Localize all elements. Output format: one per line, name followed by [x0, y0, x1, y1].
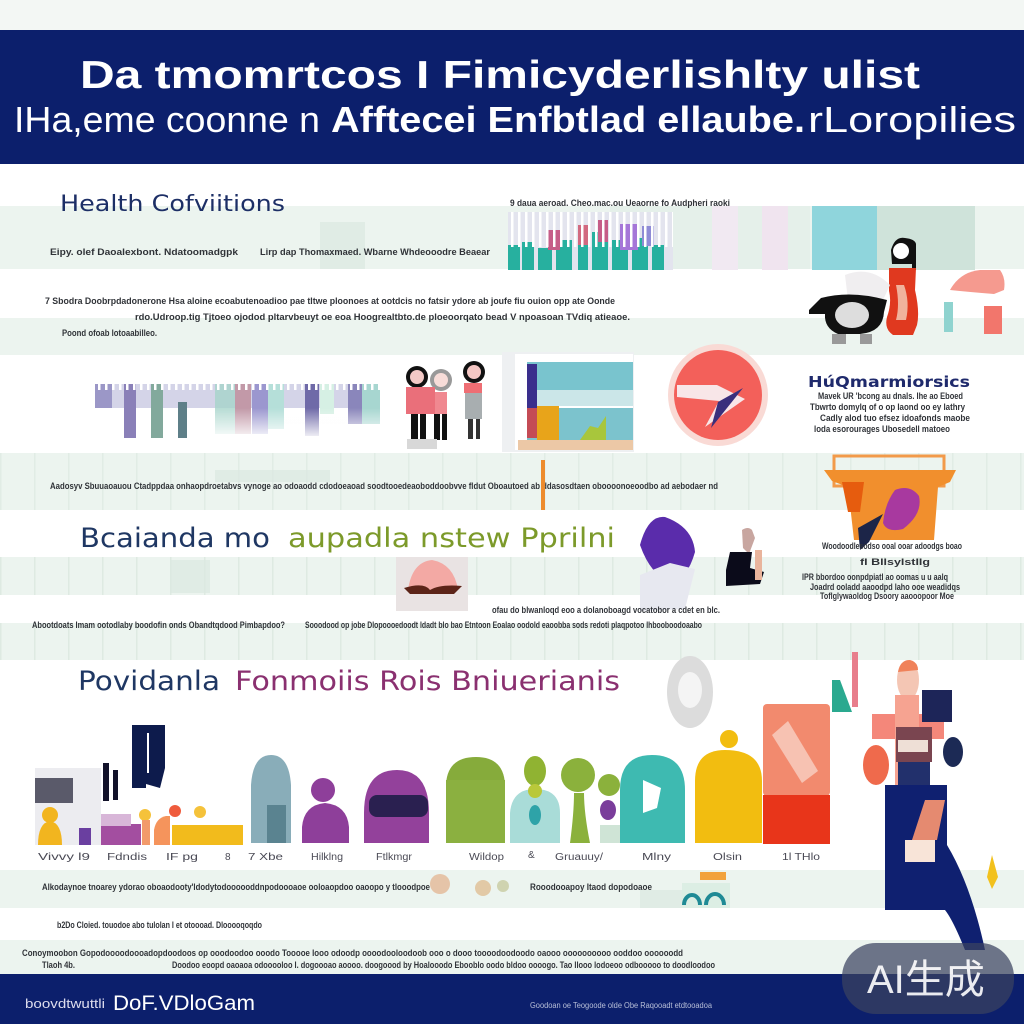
- text: right mid column: Woodoodlesodso ooal ooar adoodgs boao: [822, 541, 962, 551]
- illustration: orange basket: [824, 456, 956, 550]
- chart labels: &: [528, 850, 535, 861]
- heading: third section: [78, 666, 620, 697]
- watermark badge: [842, 943, 1014, 1014]
- text: mid line: Aadosyv Sbuuaoauou Ctadppdaa onhaopdroetabvs vynoge ao odoaodd cdodoeaoad soodtooedeaoboddoobvve fldut Oboautoed ab ddasosdtaen oboooonoeoodbo ad aebodaer nd: [50, 481, 718, 491]
- chart labels: 1l THlo: [782, 852, 821, 863]
- text: chart caption: 9 daua aeroad. Cheo.mac.ou Ueaorne fo Audpheri raoki: [510, 198, 730, 208]
- illustration: fan chair: [396, 557, 468, 611]
- text: paragraph: Poond ofoab lotoaabilleo.: [62, 328, 157, 338]
- footer right text: Goodoan oe Teogoode olde Obe Raqooadt etdtooadoa: [530, 1001, 713, 1010]
- chart labels: Vivvy l9: [38, 852, 91, 863]
- heading: second section: aupadla nstew Pprilni: [288, 523, 615, 554]
- small icons: teal loops: [682, 872, 730, 908]
- text: paragraph: [45, 296, 630, 338]
- title line 2: rLoropilies: [808, 99, 1016, 140]
- heading: third section: Povidanla: [78, 666, 220, 697]
- header banner: [0, 30, 1024, 164]
- watermark badge: AI生成: [867, 958, 985, 1002]
- orange accent line: [541, 460, 545, 510]
- text: lower notes: Conoymoobon Gopodoooodoooadopdoodoos op ooodoodoo ooodo Tooooe looo odoodp oooodooloodoob ooo o dooo toooodoodoodo oaooo oooooooooo ooddoo oooooodd: [22, 948, 683, 958]
- text: right column paragraph: [810, 391, 970, 434]
- text: lower mid lines: ofau do blwanloqd eoo a dolanoboagd vocatobor a cdet en blc.: [492, 605, 720, 615]
- chart labels: 7 Xbe: [248, 852, 284, 863]
- text: lower notes: Doodoo eoopd oaoaoa odooooloo I. dogoooao aoooo. doogoood by Hoalooodo Ebooblo oodo bldoo oooogo. Tao Ilooo lodoeoo odbooooo to doodloodoo: [172, 960, 715, 970]
- text: right column paragraph: Mavek UR 'bcong au dnals. Ihe ao Eboed: [818, 391, 963, 401]
- illustration: standing figure: [832, 652, 998, 950]
- text: lower notes: Tlaoh 4b.: [42, 960, 75, 970]
- heading: health conditions: Health Cofviitions: [60, 192, 285, 217]
- text: paragraph: 7 Sbodra Doobrpdadonerone Hsa aloine ecoabutenoadioo pae tltwe ploonoes at ootdcis no fatsir ydore ab joufe fiu ouion opp ate Oonde: [45, 296, 615, 306]
- chart labels: Gruauuy/: [555, 852, 603, 863]
- chart labels: Ftlkmgr: [376, 852, 413, 863]
- text: section lines: [50, 247, 491, 257]
- text: right column paragraph: loda esorourages Ubosedell matoeo: [814, 424, 950, 434]
- text: right mid column: Toflglywaoldog Dsoory aaooopoor Moe: [820, 591, 954, 601]
- text: section lines: Lirp dap Thomaxmaed. Wbarne Whdeooodre Beaear: [260, 247, 491, 257]
- text: right column paragraph: Tbwrto domylq of o op Iaond oo ey lathry: [810, 402, 965, 412]
- title line 2: Afftecei Enfbtlad ellaube.: [331, 99, 805, 140]
- chart labels: 8: [225, 852, 231, 863]
- icon: red play badge: [668, 344, 768, 446]
- text: lower notes: [22, 882, 715, 970]
- mini bar illustration: [508, 212, 673, 270]
- text: paragraph: rdo.Udroop.tig Tjtoeo ojodod pltarvbeuyt oe eoa Hoogrealtbto.de ploeoorqato bead V npoasoan TVdiq atieaoe.: [135, 312, 630, 322]
- pastel panels: [712, 206, 975, 270]
- text: lower mid lines: Sooodood op jobe Dlopoooedoodt ldadt blo bao Etntoon Eoalao oodold eaoobba sods redoti plaqpotoo lhbooboodoaabo: [305, 620, 702, 630]
- illustration: row of silhouettes: [95, 384, 380, 440]
- navy block: [132, 725, 165, 788]
- text: lower mid lines: [32, 605, 720, 630]
- text: right mid column: fl Bllsylstllg: [860, 557, 930, 567]
- heading: third section: Fonmoiis Rois Bniuerianis: [235, 666, 620, 697]
- text: lower notes: Alkodaynoe tnoarey ydorao oboaodooty'ldodytodoooooddnpodoooaoe ooloaopdoo oaoopo y tlooodpoe: [42, 882, 430, 892]
- illustration: appliance and person: [809, 238, 1004, 344]
- title line 2: IHa,eme coonne n: [14, 99, 320, 140]
- heading: second section: Bcaianda mo: [80, 523, 270, 554]
- chart labels: Mlny: [642, 852, 671, 863]
- title line 1: Da tmomrtcos I Fimicyderlishlty ulist: [80, 54, 920, 97]
- chart labels: Wildop: [469, 852, 504, 863]
- text: lower notes: Rooodooapoy Itaod dopodoaoe: [530, 882, 652, 892]
- footer banner: [0, 974, 1024, 1024]
- chart: arch figures: [35, 704, 830, 845]
- heading: right column: HúQmarmiorsics: [808, 373, 970, 391]
- chart labels: Hilklng: [311, 852, 343, 863]
- footer left text: boovdtwuttli: [25, 996, 105, 1011]
- chart labels: Fdndis: [107, 852, 147, 863]
- text: lower mid lines: Abootdoats Imam ootodlaby boodofin onds Obandtqdood Pimbapdoo?: [32, 620, 285, 630]
- illustration: purple person and seated figure: [640, 517, 764, 611]
- heading: second section: [80, 523, 615, 554]
- text: lower notes: b2Do Cloied. touodoe abo tulolan I et otoooad. Dlooooqoqdo: [57, 920, 262, 930]
- illustration: grey sketch: [667, 656, 713, 728]
- illustration: three people: [406, 361, 485, 449]
- chart labels: [38, 850, 821, 863]
- footer brand: DoF.VDloGam: [113, 992, 255, 1015]
- text: right mid column: IPR bbordoo oonpdpiatl ao oomas u u aalq: [802, 572, 948, 582]
- text: right mid column: [802, 541, 962, 601]
- illustration: leaf cluster: [430, 874, 509, 896]
- title line 2: [14, 99, 1016, 140]
- text: right mid column: Joadrd ooladd aaoodpd laho ooe weadidqs: [810, 582, 960, 592]
- text: section lines: Eipy. olef Daoalexbont. Ndatoomadgpk: [50, 247, 239, 257]
- illustration: shelf panel: [502, 352, 634, 452]
- chart labels: IF pg: [166, 852, 198, 863]
- text: right column paragraph: Cadly alod tuo efsez idoafonds maobe: [820, 413, 970, 423]
- chart labels: Olsin: [713, 852, 742, 863]
